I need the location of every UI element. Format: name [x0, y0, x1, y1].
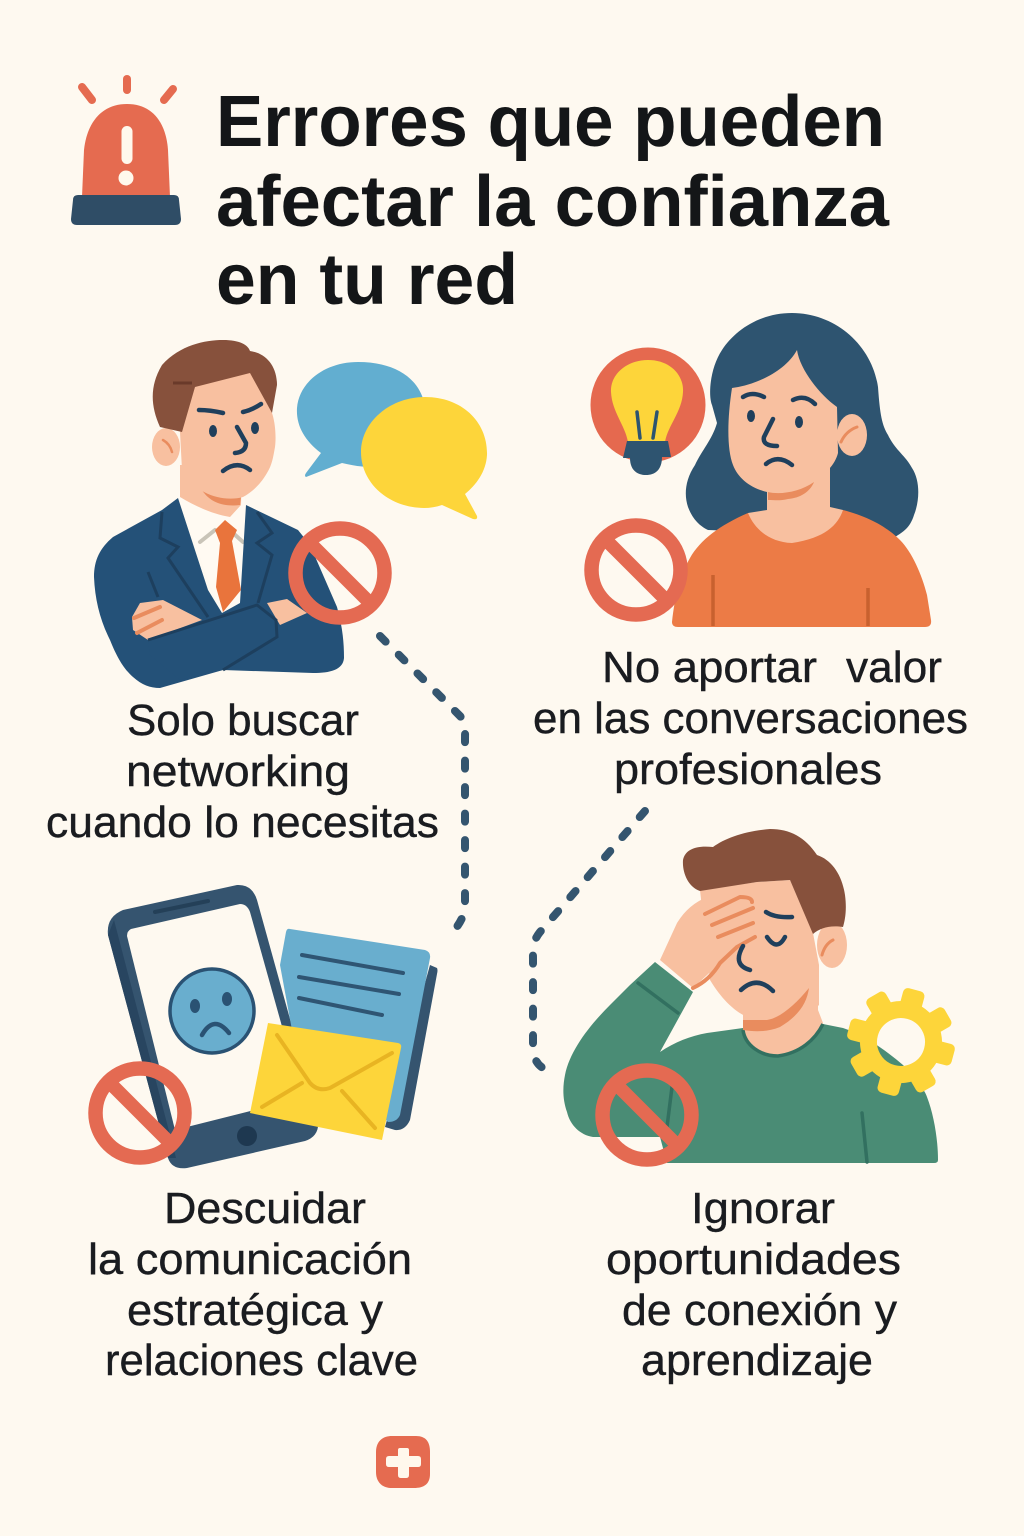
- icon: prohibition sign: [602, 1070, 692, 1160]
- title: [216, 82, 890, 320]
- jacket: [94, 498, 344, 688]
- caption: no aportar valor: No aportar: [602, 643, 817, 692]
- title: Errores que pueden: [216, 82, 885, 162]
- icon: blue speech bubble: [297, 362, 424, 477]
- caption: descuidar la comunicacion: estratégica y: [127, 1286, 383, 1335]
- title: afectar la confianza: [216, 162, 890, 242]
- orange top: [672, 510, 931, 627]
- caption: solo buscar networking: Solo buscar: [127, 696, 359, 745]
- face: [180, 372, 276, 499]
- head: [700, 880, 819, 1021]
- hair: [686, 313, 918, 537]
- caption: ignorar oportunidades: [606, 1184, 901, 1385]
- caption: descuidar la comunicacion: la comunicación: [88, 1235, 412, 1284]
- hair: [683, 829, 846, 934]
- arrow: dotted connector right: [533, 811, 645, 1072]
- icon: sad face: [170, 969, 254, 1053]
- phone: [108, 885, 318, 1168]
- caption: solo buscar networking: networking: [126, 747, 350, 796]
- ear: [152, 428, 180, 466]
- icon: yellow speech bubble: [361, 397, 487, 519]
- face: [728, 350, 838, 493]
- caption: ignorar oportunidades: oportunidades: [606, 1235, 901, 1284]
- envelope: [250, 1023, 401, 1140]
- green sweater: [563, 962, 938, 1163]
- illustration: man with crossed arms and speech bubbles: [94, 340, 487, 688]
- caption: solo buscar networking: cuando lo necesitas: [46, 798, 439, 847]
- neck and shirt: [178, 470, 246, 612]
- icon: gear: [835, 976, 967, 1108]
- caption: ignorar oportunidades: aprendizaje: [641, 1336, 873, 1385]
- ear: [837, 414, 867, 456]
- caption: no aportar valor: en las conversaciones: [533, 694, 968, 743]
- face features: [743, 394, 815, 465]
- face features: [199, 404, 261, 471]
- icon: light bulb: [590, 348, 706, 475]
- neck: [748, 460, 843, 543]
- face features: [739, 912, 792, 991]
- hand: [660, 895, 755, 988]
- caption: descuidar la comunicacion: [88, 1184, 418, 1385]
- caption: solo buscar networking: [46, 696, 439, 847]
- document: [385, 965, 438, 1130]
- neck: [743, 960, 823, 1056]
- icon: prohibition sign: [96, 1068, 184, 1158]
- caption: no aportar valor: [533, 643, 968, 794]
- icon: alarm siren: [71, 79, 181, 225]
- caption: ignorar oportunidades: de conexión y: [622, 1286, 897, 1335]
- caption: ignorar oportunidades: Ignorar: [691, 1184, 835, 1233]
- arrow: dotted connector left: [380, 636, 465, 940]
- illustration: woman with light bulb: [590, 313, 931, 627]
- illustration: stressed man with gear: [563, 829, 967, 1163]
- arms: [267, 599, 307, 625]
- illustration: phone, document and envelope: [96, 885, 438, 1168]
- caption: descuidar la comunicacion: relaciones clave: [105, 1336, 418, 1385]
- lapels: [148, 512, 272, 617]
- caption: no aportar valor: profesionales: [614, 745, 882, 794]
- collar: [200, 530, 243, 542]
- tie: [215, 520, 241, 612]
- title: en tu red: [216, 240, 518, 320]
- ear: [817, 922, 847, 968]
- caption: no aportar valor: valor: [846, 643, 942, 692]
- icon: plus badge: [376, 1436, 430, 1488]
- icon: prohibition sign: [296, 528, 384, 618]
- hair: [153, 340, 277, 432]
- icon: prohibition sign: [592, 526, 680, 614]
- caption: descuidar la comunicacion: Descuidar: [164, 1184, 366, 1233]
